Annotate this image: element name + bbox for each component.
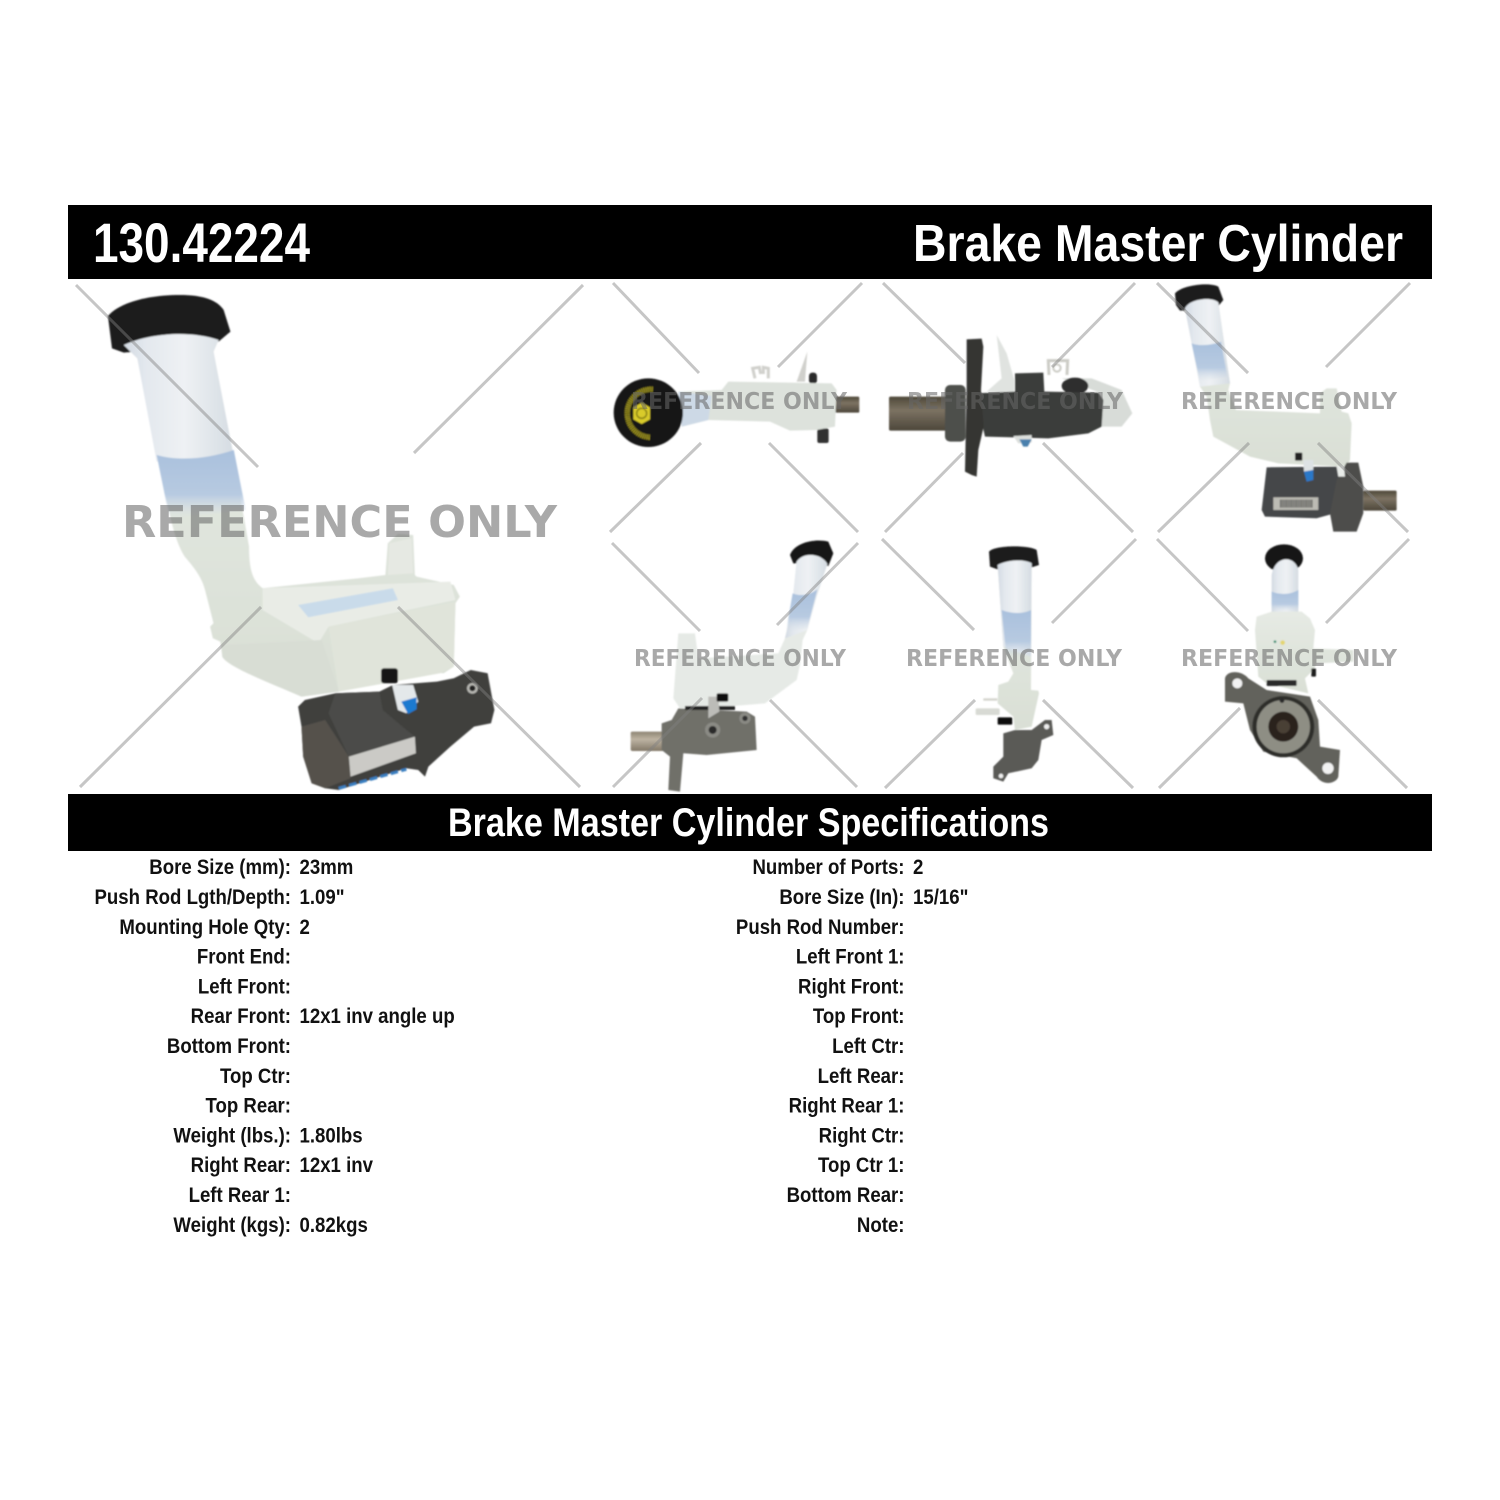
row: weight lbs: Weight (lbs.):: [173, 1124, 291, 1148]
view: bore end: [1157, 539, 1409, 788]
row: left rear 1: Left Rear 1:: [189, 1184, 291, 1207]
row: push rod length: 1.09": [300, 886, 345, 909]
row: rear front: 12x1 inv angle up: [300, 1005, 455, 1029]
row: note: Note:: [857, 1214, 904, 1237]
row: bore size mm: [149, 856, 353, 880]
watermark lines: [610, 283, 862, 532]
row: right rear 1: Right Rear 1:: [789, 1094, 904, 1118]
view: narrow profile: [882, 539, 1136, 788]
row: mounting hole qty: Mounting Hole Qty:: [119, 916, 291, 939]
watermark text: REFERENCE ONLY: [1181, 644, 1398, 672]
row: bottom rear: Bottom Rear:: [787, 1184, 904, 1207]
photo: side view with bare rod on the left: [631, 540, 833, 792]
row: top center: Top Ctr:: [220, 1065, 291, 1088]
row: rear front: [191, 1005, 455, 1029]
specifications heading: Brake Master Cylinder Specifications: [448, 801, 1049, 845]
row: weight kgs: 0.82kgs: [300, 1214, 368, 1237]
watermark lines: [76, 285, 583, 787]
row: top front: Top Front:: [813, 1005, 904, 1029]
row: right rear: [191, 1154, 374, 1178]
row: top rear: Top Rear:: [205, 1094, 291, 1118]
row: left rear: Left Rear:: [818, 1065, 904, 1088]
watermark text: REFERENCE ONLY: [631, 387, 848, 415]
row: right rear: Right Rear:: [191, 1154, 291, 1178]
photo: side view with barcode label: [1175, 284, 1397, 532]
specifications table: left column: [95, 856, 455, 1237]
row: bore size inches: 15/16": [913, 886, 968, 909]
watermark text: REFERENCE ONLY: [906, 644, 1123, 672]
watermark lines: [1157, 539, 1409, 788]
part number: 130.42224: [93, 211, 310, 274]
product title: Brake Master Cylinder: [913, 215, 1403, 273]
row: right center: Right Ctr:: [819, 1124, 904, 1148]
row: weight lbs: [173, 1124, 363, 1148]
specifications heading bar: [68, 794, 1432, 851]
watermark lines: [1157, 283, 1410, 532]
row: bore size mm: 23mm: [300, 856, 353, 880]
row: weight kgs: [173, 1214, 368, 1237]
row: left front 1: Left Front 1:: [796, 945, 904, 969]
view: rear side: [612, 540, 858, 792]
watermark lines: [612, 543, 858, 787]
row: front end: Front End:: [197, 945, 291, 969]
row: left front: Left Front:: [198, 975, 291, 999]
watermark lines: [883, 283, 1135, 532]
row: bore size inches: Bore Size (In):: [779, 886, 904, 909]
view: top of cap: [610, 283, 862, 532]
row: number of ports: 2: [913, 856, 923, 880]
watermark text: REFERENCE ONLY: [907, 387, 1124, 415]
view: label side: [1157, 283, 1410, 532]
photo: cylinder underside with push rod: [889, 335, 1132, 477]
watermark text: REFERENCE ONLY: [634, 644, 847, 672]
row: number of ports: Number of Ports:: [752, 856, 904, 880]
row: bore size mm: Bore Size (mm):: [149, 856, 291, 880]
photo: large master cylinder: [108, 295, 494, 790]
row: rear front: Rear Front:: [191, 1005, 291, 1029]
main product view: [76, 285, 583, 790]
row: push rod number: Push Rod Number:: [736, 916, 904, 939]
header bar: [68, 205, 1432, 279]
watermark lines: [882, 539, 1136, 788]
photo: end-on profile with tall tube: [976, 546, 1053, 782]
row: push rod length: Push Rod Lgth/Depth:: [95, 886, 291, 909]
row: top center 1: Top Ctr 1:: [818, 1154, 904, 1178]
watermark text: REFERENCE ONLY: [1181, 387, 1398, 415]
row: weight lbs: 1.80lbs: [300, 1124, 363, 1148]
watermark text: REFERENCE ONLY: [122, 497, 558, 548]
view: underside: [883, 283, 1135, 532]
photo: bore end with mounting flange: [1225, 544, 1353, 783]
row: bore size inches: [779, 886, 968, 909]
row: weight kgs: Weight (kgs):: [173, 1214, 291, 1237]
specifications table: right column: [736, 856, 968, 1237]
row: right rear: 12x1 inv: [300, 1154, 374, 1178]
row: bottom front: Bottom Front:: [167, 1035, 291, 1058]
row: mounting hole qty: 2: [300, 916, 310, 939]
photo: reservoir seen from cap end: [614, 352, 859, 447]
row: left center: Left Ctr:: [832, 1035, 904, 1058]
row: right front: Right Front:: [798, 975, 904, 999]
